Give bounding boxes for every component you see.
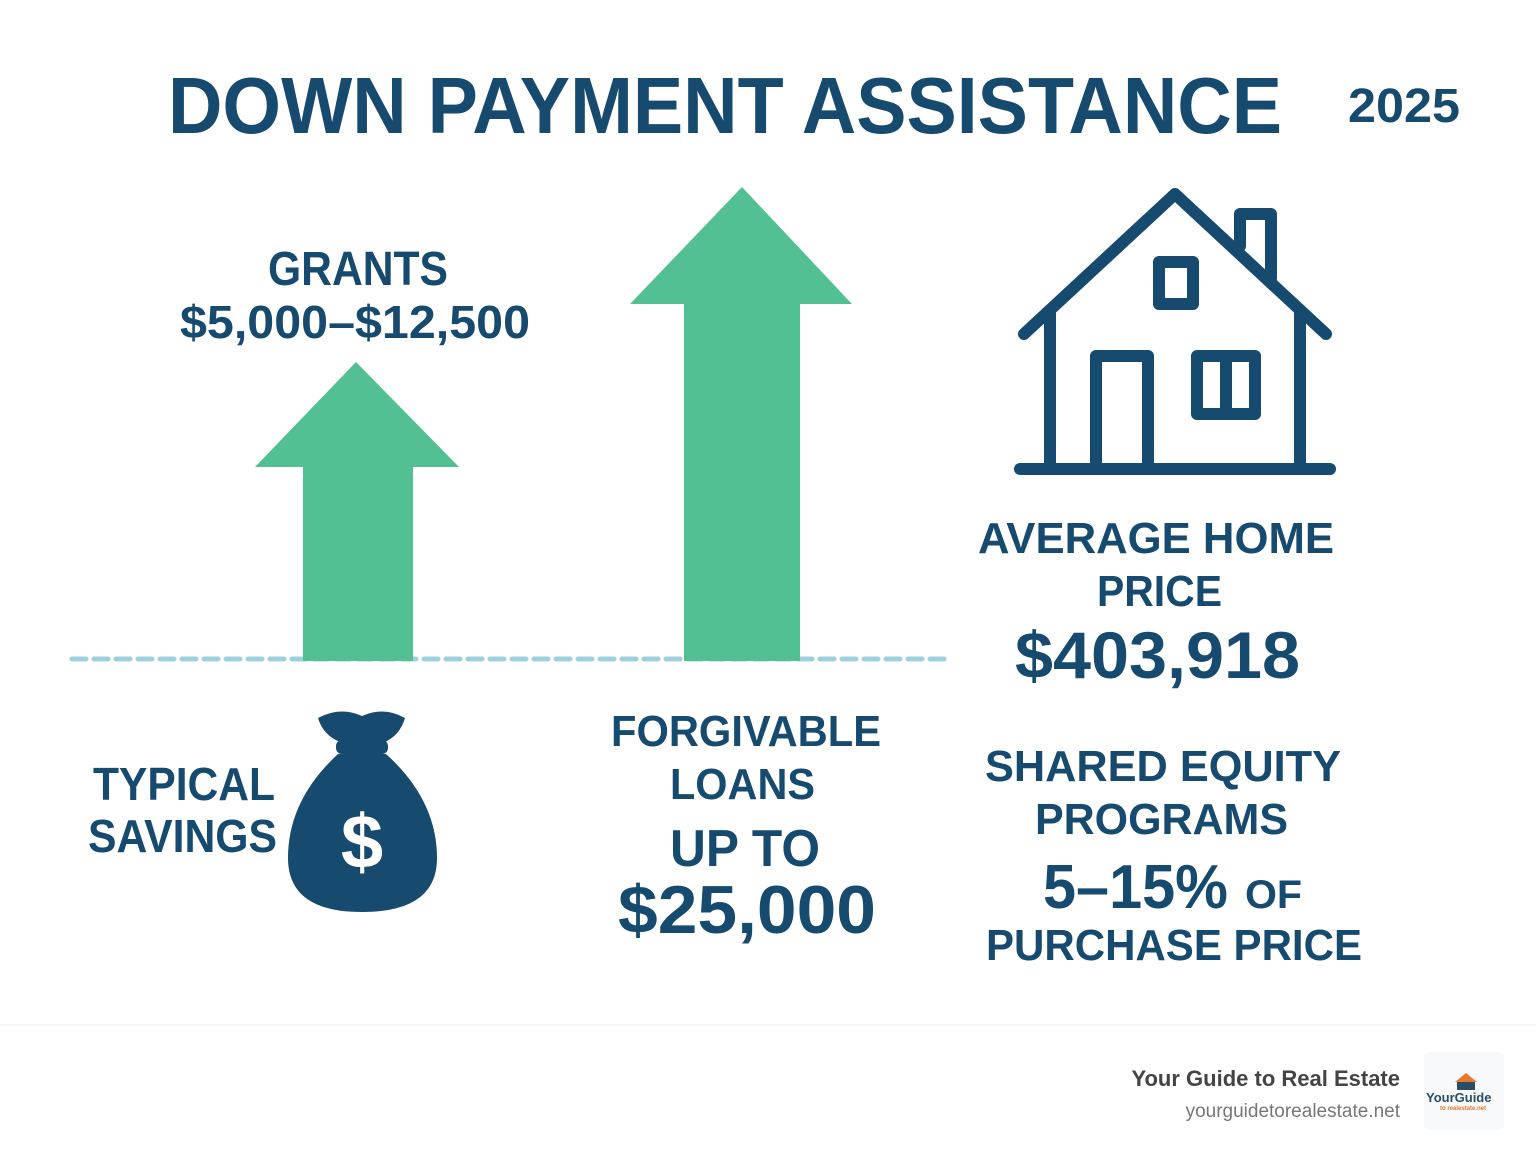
average home price: $403,918 [1015, 618, 1300, 692]
arrow: grants [255, 362, 459, 661]
forgivable loans label: LOANS [670, 760, 815, 809]
average home price [978, 514, 1334, 692]
shared equity programs [985, 742, 1362, 970]
grants label: GRANTS [268, 243, 448, 296]
title: DOWN PAYMENT ASSISTANCE [168, 61, 1282, 150]
typical savings label [88, 758, 277, 862]
forgivable loans label: FORGIVABLE [611, 707, 881, 756]
arrow: forgivable loans [630, 187, 852, 661]
forgivable loans label [611, 707, 881, 948]
icon: house [1020, 194, 1330, 469]
footer logo: YourGuide [1426, 1090, 1491, 1105]
typical savings label: SAVINGS [88, 810, 277, 862]
shared equity programs: OF [1245, 873, 1302, 917]
shared equity programs: PROGRAMS [1035, 795, 1288, 844]
shared equity programs: SHARED EQUITY [985, 742, 1341, 791]
footer brand text: Your Guide to Real Estate [1131, 1066, 1400, 1091]
icon: money bag [288, 711, 437, 912]
footer logo [1424, 1052, 1504, 1130]
shared equity programs: 5–15% [1043, 853, 1228, 922]
typical savings label: TYPICAL [93, 758, 275, 810]
forgivable loans label: UP TO [670, 820, 820, 878]
footer logo: to realestate.net [1440, 1106, 1486, 1112]
icon: money bag: $ [341, 800, 383, 885]
shared equity programs: PURCHASE PRICE [986, 921, 1362, 970]
footer brand text [1131, 1066, 1401, 1122]
dashed baseline [72, 656, 948, 662]
average home price: AVERAGE HOME [978, 514, 1334, 563]
average home price: PRICE [1097, 567, 1222, 616]
grants label [180, 243, 530, 348]
year label: 2025 [1348, 80, 1460, 133]
forgivable loans label: $25,000 [618, 872, 876, 948]
grants label: $5,000–$12,500 [180, 296, 530, 348]
footer brand text: yourguidetorealestate.net [1186, 1101, 1401, 1122]
